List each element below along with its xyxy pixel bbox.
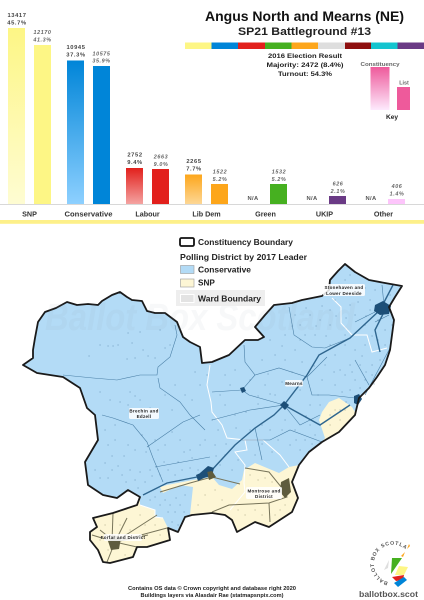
ward label: Montrose and District: District (255, 494, 273, 499)
building dots (89, 275, 392, 525)
source credits: Buildings layers via Alasdair Rae (statmapsnpix.com) (140, 593, 284, 599)
SNP area dots (100, 410, 345, 555)
source credits: Contains OS data © Crown copyright and database right 2020 (128, 585, 296, 592)
watermark: Ballot Box Scotland (45, 297, 356, 339)
party labels: SNP (22, 210, 37, 218)
key (360, 62, 410, 121)
SNP bars: 41.3% (32, 38, 52, 44)
Green bars: 5.2% (272, 177, 286, 183)
Labour bars: 2752 (127, 152, 143, 158)
Green bars: N/A (248, 196, 259, 202)
SNP bars (7, 13, 52, 204)
Green bars (248, 170, 287, 204)
logo url: ballotbox.scot (359, 589, 418, 599)
Lib Dem bars (185, 159, 228, 204)
ward label: Stonehaven and Lower Deeside (323, 284, 365, 296)
Other bars: N/A (366, 196, 377, 202)
town: Inverbervie (354, 394, 362, 405)
legend heading: Polling District by 2017 Leader (180, 253, 308, 262)
ward label: Mearns: Mearns (285, 381, 303, 386)
legend: SNP: SNP (198, 278, 215, 288)
Lib Dem bars: 7.7% (186, 166, 202, 172)
title: Angus North and Mearns (NE) (205, 8, 404, 24)
Green bars: 1532 (272, 170, 286, 176)
ward label: Stonehaven and Lower Deeside: Lower Deeside (326, 291, 362, 296)
town: Edzell (240, 387, 246, 393)
SNP bars: 45.7% (7, 20, 27, 26)
election result summary: Turnout: 54.3% (278, 71, 332, 78)
legend: conservative: Conservative (198, 266, 251, 274)
logo: Scotland shape (384, 544, 410, 587)
party labels: Conservative (64, 210, 112, 218)
minor roads (63, 285, 390, 482)
party labels (22, 210, 393, 218)
Labour bars: 9.0% (154, 162, 168, 168)
Other bars: 406 (391, 184, 403, 190)
key: Constituency (360, 62, 400, 68)
ward label: Brechin and Edzell: Brechin and (129, 408, 159, 414)
town: Friockheim (207, 471, 216, 480)
party colour band (185, 42, 424, 49)
key: List (399, 80, 409, 86)
Labour bars (126, 152, 169, 204)
source credits (128, 585, 296, 599)
ward label: Stonehaven and Lower Deeside: Stonehaven and (325, 285, 363, 290)
Conservative bars: 10945 (66, 45, 86, 51)
UKIP bars: N/A (307, 196, 318, 202)
SNP bars: 12170 (34, 30, 52, 36)
logo ring text: BALLOT BOX SCOTLAND (370, 541, 406, 586)
legend: constituency boundary: Constituency Boundary (198, 238, 293, 247)
Other bars (366, 184, 405, 204)
town: Brechin (200, 466, 214, 478)
party labels: Lib Dem (192, 210, 221, 218)
Lib Dem bars: 1522 (213, 170, 227, 176)
map legend (176, 238, 308, 306)
main roads (143, 285, 393, 495)
bar chart (0, 13, 424, 224)
town: Kirriemuir area (196, 470, 208, 481)
roads in SNP districts (92, 468, 287, 562)
key: Key (386, 114, 398, 121)
town: Forfar (108, 535, 121, 550)
election result summary (266, 53, 344, 78)
ward boundaries (140, 298, 387, 518)
Conservative bars: 37.3% (66, 52, 86, 58)
ward label: Montrose and District (246, 487, 282, 499)
Conservative bars: 35.9% (92, 58, 111, 64)
Conservative bars (66, 45, 111, 204)
party labels: Green (255, 210, 276, 218)
legend: ward boundary: Ward Boundary (198, 294, 261, 304)
map (23, 264, 402, 563)
subtitle: SP21 Battleground #13 (238, 26, 371, 38)
UKIP bars: 626 (333, 182, 344, 188)
conservative polling districts (23, 264, 402, 563)
election result summary: 2016 Election Result (268, 53, 343, 60)
town: Stonehaven (374, 301, 391, 315)
Labour bars: 9.4% (127, 160, 143, 166)
town: Montrose (280, 478, 291, 498)
SNP polling districts (90, 398, 355, 563)
ward label: Montrose and District: Montrose and (247, 488, 281, 494)
Lib Dem bars: 5.2% (213, 177, 227, 183)
ward label: Forfar and District: Forfar and District (101, 535, 146, 540)
town: Laurencekirk (280, 401, 289, 410)
party labels: UKIP (316, 210, 333, 218)
UKIP bars (307, 182, 346, 204)
Labour bars: 2663 (153, 154, 168, 160)
party labels: Labour (135, 210, 160, 218)
Conservative bars: 10575 (92, 52, 111, 58)
SNP bars: 13417 (7, 13, 27, 19)
party labels: Other (374, 210, 393, 218)
Lib Dem bars: 2265 (186, 159, 202, 165)
ward label: Brechin and Edzell: Edzell (137, 414, 151, 419)
Other bars: 1.4% (390, 192, 404, 198)
UKIP bars: 2.1% (330, 189, 345, 195)
ward label: Brechin and Edzell (129, 408, 159, 419)
constituency outline (23, 264, 402, 563)
election result summary: Majority: 2472 (8.4%) (266, 62, 344, 69)
